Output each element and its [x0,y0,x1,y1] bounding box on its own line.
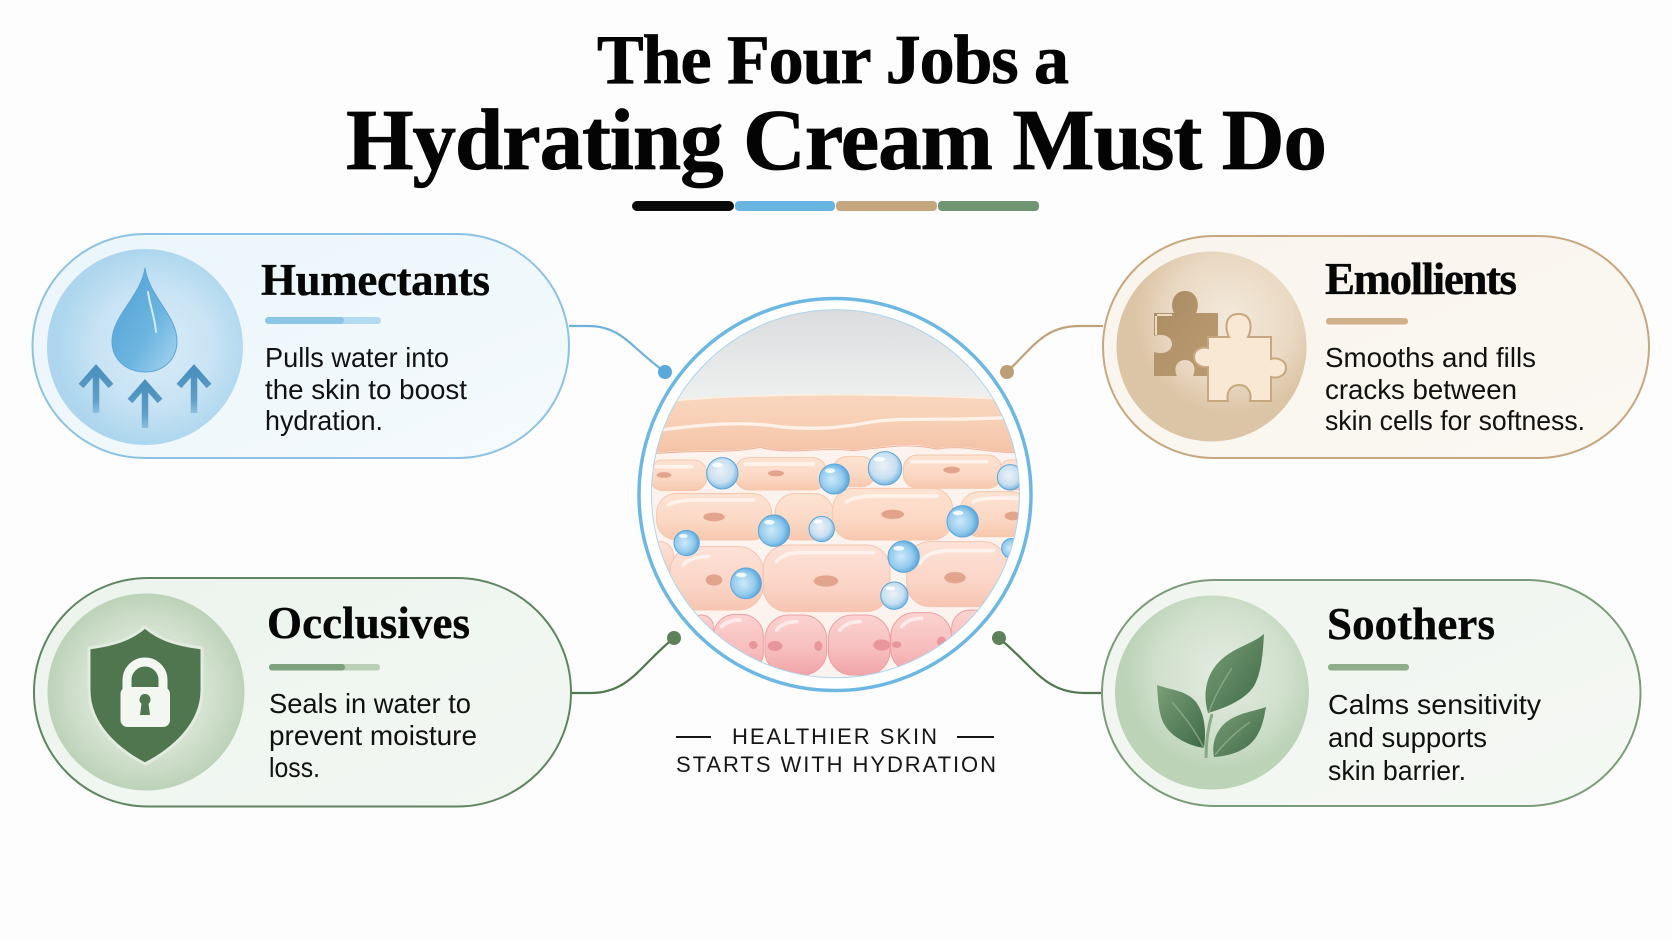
title: The Four Jobs a [597,22,1069,99]
cell highlights [657,462,1017,630]
text: humectants description: hydration. [265,405,383,436]
text: emollients description: Smooths and fills [1325,342,1536,373]
text: emollients description: skin cells for softness. [1325,405,1585,436]
heading rule [269,664,380,670]
connector: soothers [992,631,1102,693]
water bubbles [674,452,1023,609]
text: occlusives description: loss. [269,752,320,783]
outer skin layer [650,395,1023,454]
bubble glints [679,457,963,590]
text: humectants description [265,342,467,436]
central skin illustration [639,298,1031,690]
icon: leaves [1115,596,1309,790]
heading: soothers: Soothers [1327,599,1495,649]
panel: emollients [1103,236,1649,458]
text: emollients description [1325,342,1585,436]
connector: emollients [1000,326,1103,379]
panel: occlusives [34,578,571,806]
text: emollients description: cracks between [1325,374,1517,405]
title: Hydrating Cream Must Do [346,91,1327,188]
cell nuclei [657,467,1021,587]
heading: emollients: Emollients [1325,254,1517,304]
heading rule [1328,664,1409,670]
title colour bar [632,201,1039,211]
panel: soothers [1102,580,1640,806]
icon: shield with lock [48,594,244,790]
cell row 3 [647,542,1007,612]
text: occlusives description [269,688,477,783]
heading rule [265,317,381,324]
heading rule [1326,318,1408,324]
caption: HEALTHIER SKIN [732,724,937,749]
icon: puzzle pieces [1116,252,1306,442]
panel: humectants [32,234,569,458]
connector: humectants [569,326,672,379]
text: occlusives description: Seals in water to [269,688,471,719]
icon: water drop with arrows [47,249,243,445]
title [346,22,1327,188]
pink nuclei [749,637,946,651]
caption: STARTS WITH HYDRATION [676,752,996,777]
cell row 2 [657,488,1030,540]
text: soothers description: Calms sensitivity [1328,689,1541,720]
text: humectants description: the skin to boost [265,374,467,405]
text: soothers description: skin barrier. [1328,755,1466,786]
heading: humectants: Humectants [261,255,490,305]
skin cross-section [647,308,1030,680]
text: soothers description: and supports [1328,722,1487,753]
cell row 4 [690,610,992,675]
inner image outline [652,310,1020,678]
text: humectants description: Pulls water into [265,342,449,373]
connector: occlusives [571,631,681,693]
text: occlusives description: prevent moisture [269,720,477,751]
caption [676,724,996,777]
heading: occlusives: Occlusives [267,598,470,648]
text: soothers description [1328,689,1541,786]
cell row 1 [650,455,1027,491]
